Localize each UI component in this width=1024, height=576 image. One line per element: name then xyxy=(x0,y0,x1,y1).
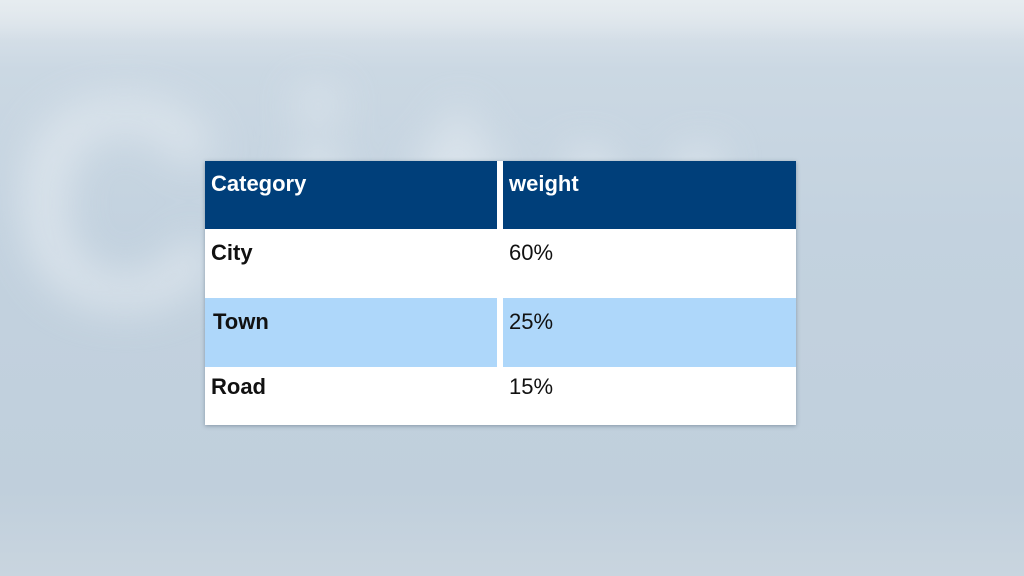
header: weight: weight xyxy=(509,171,579,196)
value: Road: 15% xyxy=(509,374,553,399)
header: Category: Category xyxy=(211,171,306,196)
row: City: City xyxy=(211,240,253,265)
row: Town: Town xyxy=(213,309,269,334)
value: Town xyxy=(503,298,796,367)
header: Category xyxy=(205,161,497,229)
row: Road: Road xyxy=(211,374,266,399)
value: Town: 25% xyxy=(509,309,553,334)
header: weight xyxy=(503,161,796,229)
table: category weights xyxy=(205,161,796,425)
row: Town xyxy=(205,298,497,367)
value: City: 60% xyxy=(509,240,553,265)
background blurred word: City xyxy=(10,35,777,371)
